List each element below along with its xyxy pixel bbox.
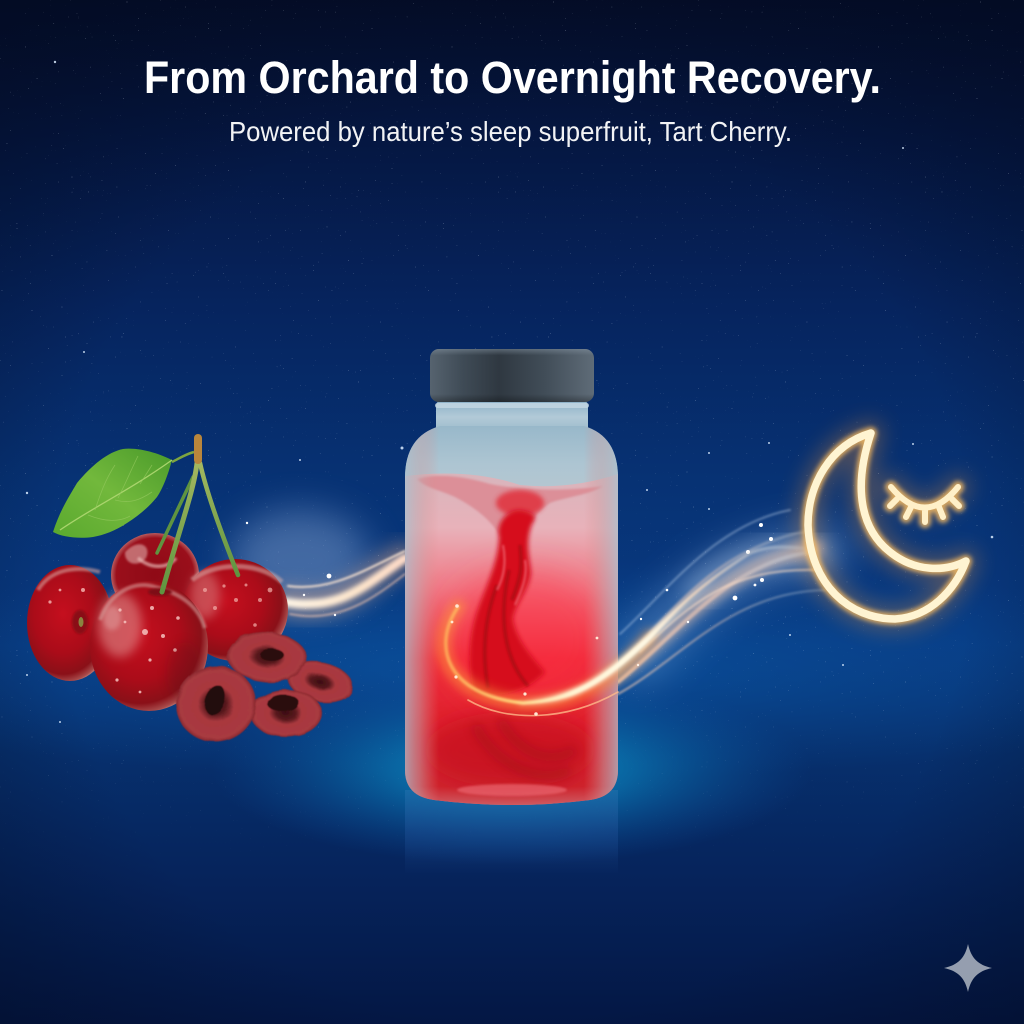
icon: sparkle watermark xyxy=(944,944,992,992)
icon: cherry leaf xyxy=(53,449,194,538)
dried cherry: bottom xyxy=(250,689,322,737)
cherry: left xyxy=(27,565,113,681)
bottle xyxy=(405,349,815,875)
icon: glowing crescent moon with closed eye xyxy=(808,433,966,619)
cherry: back xyxy=(111,533,199,617)
title: From Orchard to Overnight Recovery. xyxy=(144,52,881,103)
arrow: glowing swirl through bottle toward moon xyxy=(444,547,815,716)
red liquid with swirl xyxy=(405,473,618,810)
dried cherry: right xyxy=(284,656,356,708)
bottle glass body xyxy=(405,426,618,805)
cherry stems xyxy=(157,438,238,592)
arrow: light trail from cherries to bottle xyxy=(230,510,405,616)
cherries and dried cherries xyxy=(27,438,356,748)
cherry: front xyxy=(90,581,208,711)
glass side frosting xyxy=(405,426,618,805)
subtitle: Powered by nature’s sleep superfruit, Tart Cherry. xyxy=(229,116,792,147)
bottle cap xyxy=(430,349,594,402)
arrow: haze of the light trail toward the moon xyxy=(610,510,825,694)
dried cherry: front xyxy=(170,660,262,748)
tornado funnel rim xyxy=(417,476,603,537)
bottle neck xyxy=(435,400,589,434)
dried cherry: top xyxy=(225,629,309,685)
bottle reflection xyxy=(405,790,618,875)
tornado shaft xyxy=(470,510,545,695)
cherry: right xyxy=(182,559,288,661)
